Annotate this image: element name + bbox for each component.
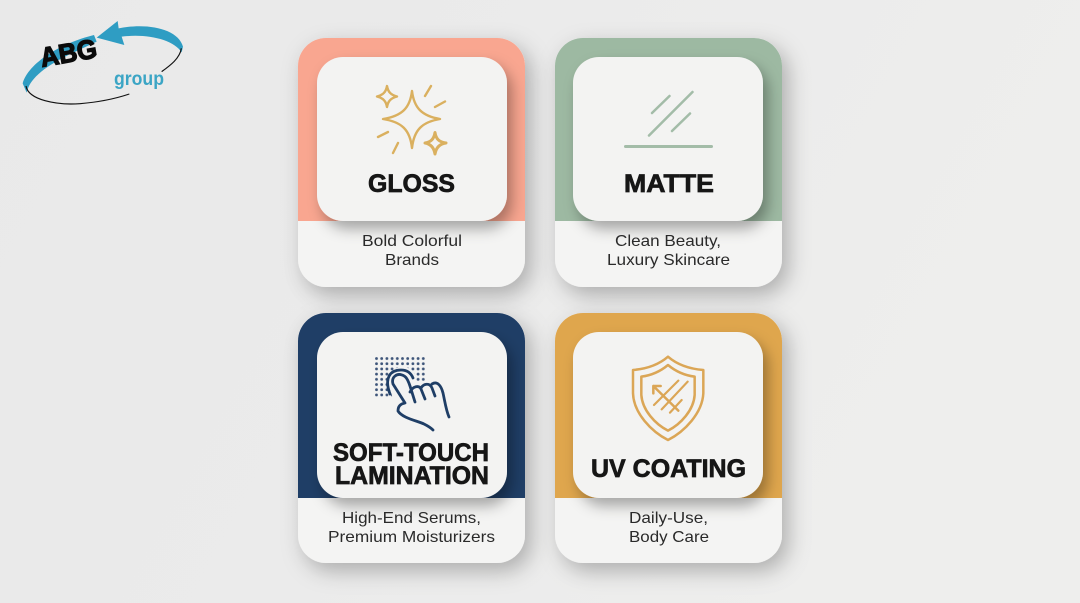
gloss colour band: [298, 38, 525, 221]
gloss inner card: [317, 57, 507, 221]
logo ABG wordmark: ABG: [38, 33, 99, 73]
matte description: Luxury Skincare: [607, 252, 730, 269]
panel: soft-touch lamination: [298, 313, 525, 563]
lamination title: LAMINATION: [335, 462, 489, 490]
uv inner card: [573, 332, 763, 498]
matte card base: [555, 38, 782, 287]
gloss description: [362, 233, 462, 269]
soft-touch description: High-End Serums,: [342, 510, 481, 527]
logo left swoosh: [23, 35, 97, 93]
gloss card base: [298, 38, 525, 287]
icon: hand touching textured dots: [375, 357, 452, 432]
icon: sparkles: [377, 86, 446, 154]
panel: uv coating: [555, 313, 782, 563]
soft-touch card base: [298, 313, 525, 563]
dot texture: [375, 357, 427, 398]
matte title: MATTE: [624, 170, 714, 198]
logo black orbit line: [26, 48, 181, 104]
hand outline: [388, 370, 449, 430]
matte inner card: [573, 57, 763, 221]
hand halo: [389, 367, 452, 432]
gloss description: Bold Colorful: [362, 233, 462, 250]
uv description: [629, 510, 709, 546]
uv description: Body Care: [629, 529, 709, 546]
matte description: Clean Beauty,: [615, 233, 721, 250]
logo group wordmark: group: [114, 69, 164, 90]
gloss title: GLOSS: [368, 170, 455, 198]
soft-touch inner card: [317, 332, 507, 498]
uv description: Daily-Use,: [629, 510, 708, 527]
soft-touch colour band: [298, 313, 525, 498]
soft-touch description: [328, 510, 495, 546]
panel: gloss: [298, 38, 525, 287]
soft-touch title: SOFT-TOUCH: [333, 439, 489, 467]
icon: matte surface: [626, 92, 712, 146]
uv card base: [555, 313, 782, 563]
panel: matte: [555, 38, 782, 287]
matte colour band: [555, 38, 782, 221]
icon: uv shield: [633, 357, 703, 440]
matte description: [607, 233, 730, 269]
soft-touch description: Premium Moisturizers: [328, 529, 495, 546]
logo: ABG group: [23, 21, 183, 104]
logo arrow swoosh: [97, 21, 183, 52]
uv colour band: [555, 313, 782, 498]
uv title: UV COATING: [591, 455, 746, 483]
gloss description: Brands: [385, 252, 439, 269]
